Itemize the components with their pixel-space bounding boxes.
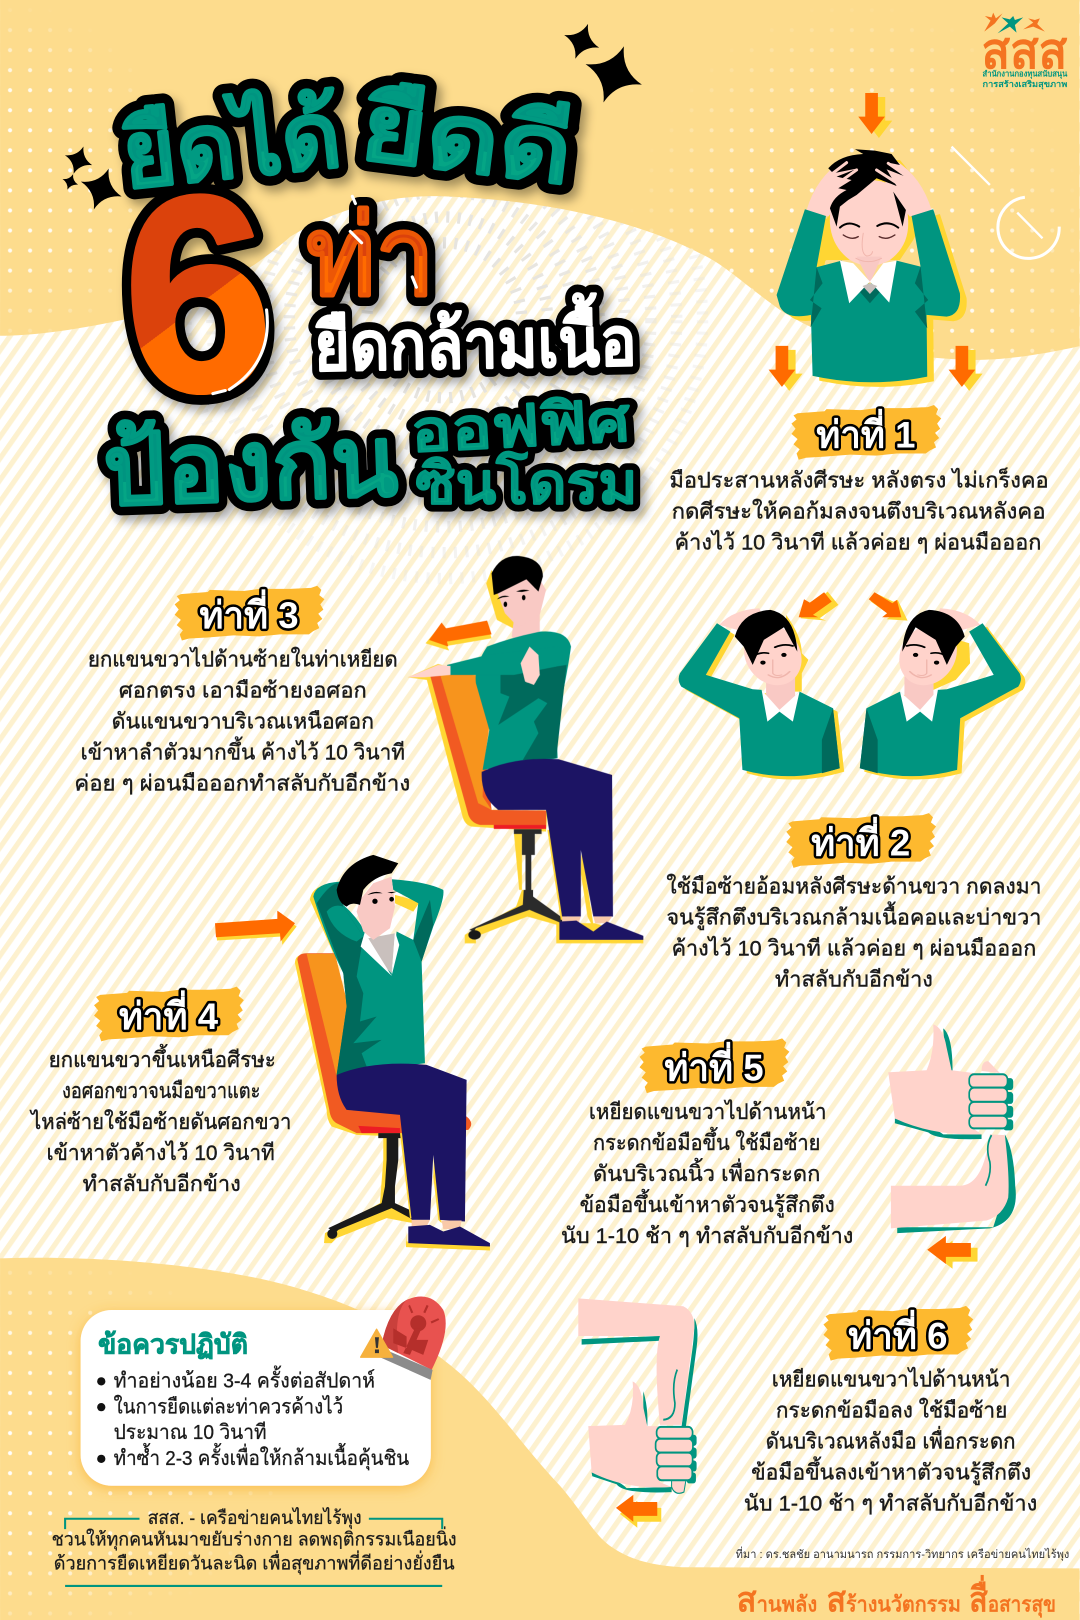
illustration: man 4 seated, arm behind head [295, 855, 490, 1250]
man 1 hair [828, 149, 906, 227]
siren dome shade [382, 1300, 407, 1353]
text: step 3 [74, 646, 410, 795]
badge: ท่าที่ 1: ท่าที่ 1 [816, 408, 915, 455]
logo wordmark: สสส [982, 23, 1068, 79]
hand 5 fingertip [982, 1061, 1000, 1073]
text: step 5: ดันบริเวณนิ้ว เพื่อกระดก [593, 1158, 820, 1186]
man 4 shoes shadow [406, 1230, 490, 1250]
title black outline layer: ออฟฟิศ [409, 389, 633, 465]
man 1 shadow [783, 214, 967, 387]
man 4 face details [367, 892, 397, 904]
arrow: down, left [769, 346, 803, 391]
text: step 6: ดันบริเวณหลังมือ เพื่อกระดก [766, 1426, 1016, 1453]
hand 6 arm crease [663, 1370, 677, 1420]
text: step 3: ศอกตรง เอามือซ้ายงอศอก [119, 677, 367, 702]
man 4 sweater [313, 879, 443, 1075]
man 3 face details [497, 590, 530, 607]
left sweater fold [822, 708, 840, 773]
text: step 1: มือประสานหลังศีรษะ หลังตรง ไม่เกร็งคอ [670, 466, 1049, 493]
illustration: man 1, hands on head [777, 149, 967, 387]
man 1 collar [840, 261, 897, 303]
hand 6 palm [588, 1381, 672, 1487]
hand 5 fingers [969, 1074, 1008, 1128]
text: step 3: ดันแขนขวาบริเวณเหนือศอก [112, 708, 374, 733]
title black outline layer: ยืดดี [356, 74, 579, 204]
text: step 3: ค่อย ๆ ผ่อนมือออกทำสลับกับอีกข้าง [74, 770, 410, 795]
title black outline layer: ยืดได้ [117, 80, 346, 208]
man 1 hands [807, 160, 932, 217]
right face [892, 621, 964, 689]
decoration: white clock line shapes [952, 147, 1059, 258]
arrow: down, top [858, 93, 892, 138]
man 4 ankles [412, 1220, 462, 1229]
text: step 1: ค้างไว้ 10 วินาที แล้วค่อย ๆ ผ่อนมือออก [675, 530, 1041, 555]
chair 3 shadow [408, 664, 547, 832]
man 4 hair [337, 855, 398, 907]
right head shadow [933, 640, 970, 690]
man 3 shoes [559, 921, 643, 940]
text: step 1 [670, 466, 1049, 555]
badge: ท่าที่ 4 [94, 987, 244, 1041]
panel list: ในการยืดแต่ละท่าควรค้างไว้ [114, 1394, 343, 1418]
title: 6: 6 [113, 134, 281, 455]
badge: ท่าที่ 2: ท่าที่ 2 [811, 816, 910, 863]
chair 3 back cushion [440, 675, 492, 810]
left hair [735, 610, 797, 665]
text: step 4 [29, 1044, 291, 1196]
panel: recommendations [81, 1310, 431, 1486]
badge: ท่าที่ 6 [823, 1306, 973, 1361]
chair 3 under seat [494, 825, 546, 829]
chair 3 stem [469, 829, 563, 932]
right sweater [860, 623, 1021, 776]
hand 5 nubs [1003, 1078, 1013, 1130]
hand 5 forearm crease [986, 1135, 992, 1186]
arrow: man 3 shoulder [426, 621, 492, 651]
title: ยืดกล้ามเนื้อ: ยืดกล้ามเนื้อ [313, 291, 637, 386]
left head shadow [782, 615, 808, 692]
man 4 leg shadow [400, 1133, 442, 1223]
arrow: down, right [949, 346, 983, 391]
man 3 arm [447, 647, 562, 675]
chair 4 stem and base [328, 1133, 413, 1233]
badge: ท่าที่ 4: ท่าที่ 4 [119, 990, 218, 1037]
right figure [860, 608, 1025, 780]
hand 5 palm [888, 1024, 982, 1135]
text: step 6: ข้อมือขึ้นลงเข้าหาตัวจนรู้สึกตึง [751, 1456, 1031, 1485]
text: step 1: กดศีรษะให้คอก้มลงจนตึงบริเวณหลังคอ [672, 499, 1046, 524]
man 4 legs [337, 1064, 467, 1222]
title highlights on 6 and ท่า [213, 196, 416, 394]
left sweater [679, 623, 840, 776]
badge: ท่าที่ 3 [175, 586, 324, 641]
man 3 ankles [562, 917, 612, 923]
badge: ท่าที่ 5: ท่าที่ 5 [664, 1042, 764, 1089]
man 1 undershirt [863, 283, 877, 294]
right neck [904, 677, 933, 713]
left collar [762, 690, 800, 722]
arrow: man 4 right [215, 911, 297, 945]
badge: ท่าที่ 1 [791, 405, 941, 460]
siren base [378, 1348, 433, 1380]
chair 4 under seat [358, 1126, 400, 1133]
title black outline layer: ซินโดรม [415, 449, 637, 516]
hand 6 arm green edge [582, 1318, 698, 1426]
man 3 leg shadow [547, 830, 594, 930]
man 3 shoes shadow [556, 923, 643, 943]
text: step 2: จนรู้สึกตึงบริเวณกล้ามเนื้อคอและบ่าขวา [666, 902, 1041, 931]
right sweater fold [860, 708, 878, 773]
hand 6 thumb tip [672, 1480, 686, 1493]
man 4 arms shadow [310, 883, 420, 953]
text: step 2: ค้างไว้ 10 วินาที แล้วค่อย ๆ ผ่อนมือออก [672, 936, 1036, 961]
left figure [679, 608, 844, 780]
panel box [81, 1310, 431, 1486]
left face [737, 621, 809, 689]
badge: ท่าที่ 5 [640, 1038, 789, 1093]
slogan 2: สร้างนวัตกรรม [827, 1581, 961, 1620]
text: step 6: นับ 1-10 ช้า ๆ ทำสลับกับอีกข้าง [744, 1490, 1037, 1515]
chair 4 base shadow [324, 1138, 413, 1243]
badge: ท่าที่ 3: ท่าที่ 3 [199, 589, 299, 636]
hand 5 forearm [891, 1134, 1009, 1228]
badge: ท่าที่ 2 [786, 813, 936, 868]
panel list: ประมาณ 10 วินาที [114, 1421, 267, 1444]
text: invitation: ชวนให้ทุกคนหันมาขยับร่างกาย ลดพฤติกรรมเนือยนิ่ง [52, 1527, 457, 1552]
text: step 2 [666, 874, 1041, 992]
logo caption line 1: สำนักงานกองทุนสนับสนุน [983, 68, 1068, 79]
logo caption line 2: การสร้างเสริมสุขภาพ [983, 79, 1068, 90]
left figure shadow [683, 627, 844, 780]
title group [102, 74, 637, 527]
text: step 6 [744, 1367, 1037, 1515]
man 1 finger strokes [828, 163, 905, 187]
background: dashed sunburst [186, 62, 703, 579]
panel bullets [97, 1377, 105, 1463]
text: invitation [52, 1527, 457, 1575]
chair 4 shadow [295, 955, 467, 1137]
bracket lines [65, 1519, 442, 1586]
chair 4 back cushion [307, 954, 348, 1077]
title black outline layer: ป้องกัน [102, 406, 400, 527]
man 3 head shadow [486, 570, 516, 630]
panel heading: ข้อควรปฏิบัติ [98, 1329, 248, 1359]
hand 5 forearm green edge [897, 1134, 1016, 1233]
man 3 legs [482, 759, 613, 917]
chair 3 wheel [468, 930, 481, 940]
icon: siren with warning [361, 1297, 446, 1380]
text: step 4: ทำสลับกับอีกข้าง [83, 1171, 241, 1196]
man 1 head [830, 180, 908, 266]
right face details [907, 645, 947, 678]
man 3 neck [512, 615, 540, 648]
text: source: ที่มา : ดร.ชลชัย อานามนารถ กรรมการ-วิทยากร เครือข่ายคนไทยไร้พุง [736, 1546, 1069, 1561]
text: step 5: กระดกข้อมือขึ้น ใช้มือซ้าย [593, 1127, 820, 1155]
chair 3 base shadow [465, 833, 563, 943]
panel list: ทำซ้ำ 2-3 ครั้งเพื่อให้กล้ามเนื้อคุ้นชิน [114, 1443, 409, 1471]
text: step 3: ยกแขนขวาไปด้านซ้ายในท่าเหยียด [88, 646, 398, 671]
title: ออฟฟิศ: ออฟฟิศ [409, 389, 633, 465]
hand 6 palm green edge [592, 1391, 672, 1492]
man 4 collar [361, 932, 399, 976]
text: step 5 [561, 1099, 853, 1248]
text: step 2: ทำสลับกับอีกข้าง [775, 967, 933, 992]
text: invitation: ด้วยการยืดเหยียดวันละนิด เพื่อสุขภาพที่ดีอย่างยั่งยืน [54, 1550, 455, 1575]
arrow: tilt right figure [869, 592, 908, 621]
slogan 3: สื่อสารสุข [969, 1575, 1056, 1620]
left face details [753, 645, 793, 678]
man 4 face [357, 877, 395, 940]
warning triangle [361, 1329, 393, 1357]
man 3 hand on chair [408, 665, 451, 677]
hand 6 nubs [687, 1435, 697, 1483]
text: step 5: ข้อมือขึ้นเข้าหาตัวจนรู้สึกตึง [580, 1189, 835, 1218]
man 4 shirt [367, 933, 395, 973]
arrow: tilt left figure [799, 592, 838, 621]
illustration: man 2, head tilt pair [679, 608, 1025, 780]
title: ซินโดรม: ซินโดรม [415, 449, 637, 516]
man 3 torso [476, 631, 571, 770]
text: step 6: กระดกข้อมือลง ใช้มือซ้าย [776, 1397, 1007, 1422]
illustration: wrist stretch up [888, 1024, 1016, 1233]
footer slogan [737, 1575, 1056, 1620]
title: ป้องกัน: ป้องกัน [102, 406, 400, 527]
title black outline layer: ท่า [306, 193, 435, 318]
man 3 raised hand [521, 647, 540, 685]
right hand [936, 608, 980, 630]
siren lamp [393, 1305, 439, 1355]
man 3 face [497, 573, 546, 627]
logo stars [984, 13, 1045, 33]
text: step 4: ยกแขนขวาขึ้นเหนือศีรษะ [49, 1044, 276, 1072]
title: ท่า: ท่า [306, 193, 435, 318]
slogan 1: สานพลัง [737, 1581, 817, 1620]
hand 5 palm green edge [895, 1028, 982, 1139]
arrow: hand 6 left [616, 1495, 661, 1528]
man 1 sweater folds [810, 267, 928, 328]
title black outline layer: 6 [113, 134, 281, 455]
man 3 hair [492, 556, 543, 595]
chair 3 frame [430, 665, 546, 825]
panel list: ทำอย่างน้อย 3-4 ครั้งต่อสัปดาห์ [114, 1366, 375, 1393]
left hand [719, 608, 764, 630]
title black outline layer [102, 74, 637, 527]
title: ยืดได้: ยืดได้ [117, 80, 346, 208]
panel list [114, 1366, 409, 1471]
right hair [902, 610, 965, 665]
illustration: man 3 seated, arm across chest [408, 556, 643, 943]
badge: ท่าที่ 6: ท่าที่ 6 [848, 1309, 947, 1356]
hand 6 arm [578, 1298, 694, 1425]
man 4 sweater shading [317, 883, 433, 1075]
text: step 4: เข้าหาตัวค้างไว้ 10 วินาที [47, 1140, 275, 1165]
text: step 4: ไหล่ซ้ายใช้มือซ้ายดันศอกขวา [29, 1109, 291, 1134]
man 1 head shadow [817, 160, 927, 267]
chair 4 wheel [327, 1229, 337, 1239]
hand 6 fingers [656, 1427, 693, 1480]
arrow: hand 5 left [927, 1236, 978, 1269]
chair 4 frame [297, 953, 471, 1133]
text: step 5: นับ 1-10 ช้า ๆ ทำสลับกับอีกข้าง [561, 1223, 853, 1248]
man 1 sweater [777, 209, 960, 382]
warning mark [375, 1337, 379, 1353]
text: step 4: งอศอกขวาจนมือขวาแตะ [62, 1078, 260, 1103]
illustration: wrist stretch down [578, 1298, 698, 1493]
text: network heading: สสส. - เครือข่ายคนไทยไร้พุง [148, 1507, 362, 1530]
man 1 face details [840, 223, 898, 262]
title black outline layer: ยืดกล้ามเนื้อ [313, 291, 637, 386]
siren dome [382, 1297, 446, 1370]
man 1 neck [857, 257, 882, 283]
text: step 6: เหยียดแขนขวาไปด้านหน้า [772, 1367, 1010, 1392]
text: step 3: เข้าหาลำตัวมากขึ้น ค้างไว้ 10 วินาที [81, 736, 405, 764]
man 4 inner arm highlight [327, 906, 363, 942]
logo: สสส [982, 13, 1068, 90]
text: step 5: เหยียดแขนขวาไปด้านหน้า [589, 1099, 827, 1124]
left neck [766, 677, 795, 713]
man 4 shoes [408, 1225, 490, 1246]
man 3 torso shading [498, 665, 567, 760]
title: ยืดดี: ยืดดี [356, 74, 579, 204]
right figure shadow [864, 627, 1025, 780]
right collar [900, 690, 938, 722]
text: step 2: ใช้มือซ้ายอ้อมหลังศีรษะด้านขวา กดลงมา [666, 874, 1041, 899]
sparkles [60, 17, 652, 217]
